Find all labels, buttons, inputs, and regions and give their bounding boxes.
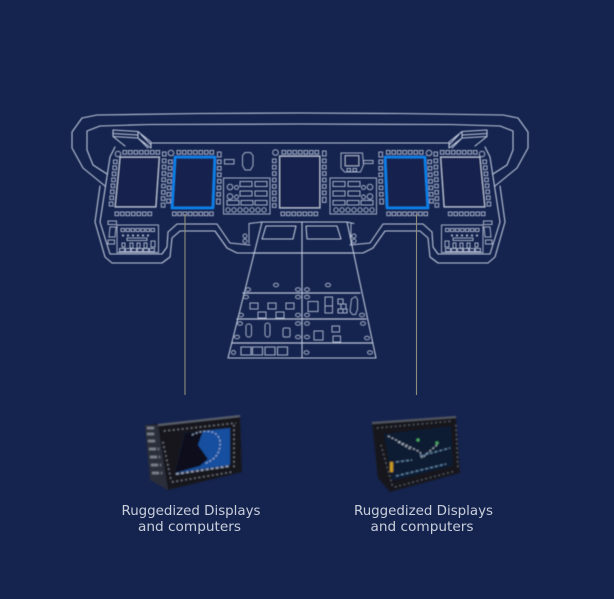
left rugged display device xyxy=(145,416,242,490)
mirrored right half of the console xyxy=(300,113,528,263)
right caption: Ruggedized Displays xyxy=(354,504,493,519)
left caption: Ruggedized Displays xyxy=(122,504,261,519)
centre-side control panel xyxy=(224,178,270,214)
small monitor xyxy=(341,153,373,172)
indicator and capsule switch xyxy=(224,152,253,170)
display buttons xyxy=(109,150,221,216)
blue highlighted display xyxy=(172,157,215,208)
left caption: and computers xyxy=(138,520,241,535)
connector line right xyxy=(416,214,418,395)
cockpit line drawing xyxy=(72,113,528,358)
visor xyxy=(113,130,151,148)
left half of the console xyxy=(72,113,300,263)
centre display buttons xyxy=(272,150,326,216)
centre display xyxy=(272,150,326,216)
right caption: and computers xyxy=(370,520,474,535)
console outline xyxy=(72,113,300,263)
pedestal windows xyxy=(262,226,341,239)
connector line left xyxy=(184,214,186,395)
centre pedestal xyxy=(228,222,376,358)
right rugged display device xyxy=(372,417,460,492)
outer display xyxy=(115,157,160,207)
lower corner keypad xyxy=(108,221,158,252)
pedestal controls xyxy=(232,234,372,355)
